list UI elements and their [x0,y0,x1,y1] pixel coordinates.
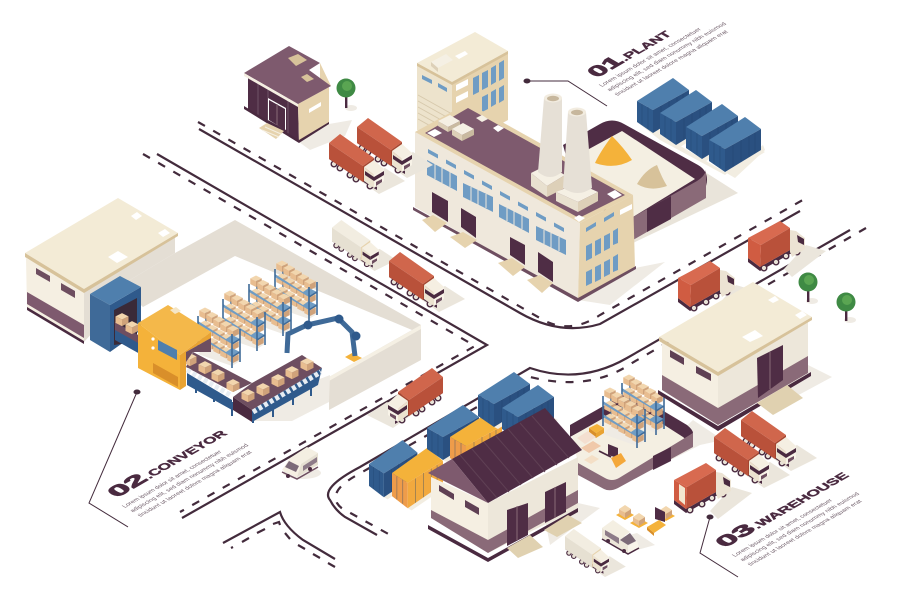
heading: 02.CONVEYOR [102,425,233,501]
icon: tree far right [836,292,856,323]
text block: plant: tincidunt ut laoreet dolore magna aliquam erat [613,29,730,97]
heading: 01.PLANT: .PLANT [616,29,676,63]
truck: red road [389,252,465,312]
truck: red north-east 2 [748,221,826,277]
heading: 01.PLANT: 01 [582,53,629,81]
icon: tree right [798,272,818,304]
text block: plant: Lorem ipsum dolor sit amet, consectetuer [598,27,703,88]
truck: red warehouse 2 [714,428,790,488]
truck: cream bottom [565,529,626,577]
heading: 03.WAREHOUSE [710,467,854,551]
yard goods [577,424,604,464]
left facade windows [427,149,566,255]
callout: 03 warehouse [700,467,870,577]
panel: conveyor belts [115,313,322,423]
truck: cream road [332,220,397,271]
heading: 02.CONVEYOR: .CONVEYOR [140,428,231,481]
panel: office building [244,46,352,150]
panel: factory tower [417,32,508,150]
panel: factory yard [563,120,738,243]
panel: right warehouse [658,282,832,431]
heading: 02.CONVEYOR: 02 [102,471,153,501]
factory doors [432,192,553,282]
truck: red warehouse 1 [741,411,817,471]
panel: forklift and pallets [616,505,675,536]
panel: yellow machine [138,305,211,390]
panel: blue containers plant [637,78,765,178]
forklift [599,444,626,468]
text block: warehouse: tincidunt ut laoreet dolore magna aliquam erat [746,499,864,567]
icon: tree near office [336,78,357,111]
text block: warehouse: Lorem ipsum dolor sit amet, consectetuer [731,498,835,558]
heading: 03.WAREHOUSE: .WAREHOUSE [748,470,852,531]
heading: 03.WAREHOUSE: 03 [710,521,761,551]
loading ramps [422,215,553,293]
panel: warehouse containers [369,372,558,510]
text block: plant: adipiscing elit, sed diam nonummy nibh euismod [605,21,729,93]
truck: red south-west [367,368,443,428]
text block: warehouse: adipiscing elit, sed diam nonummy nibh euismod [738,491,862,563]
panel: conveyor hall wall [120,220,421,421]
robot arm [287,314,362,362]
van: white road [282,447,321,479]
panel: warehouse yard [570,375,723,490]
text block: conveyor: adipiscing elit, sed diam nonummy nibh euismod [128,443,251,514]
van: white bottom [602,520,655,554]
heading: 01.PLANT [582,26,677,81]
truck: red warehouse open back [674,463,752,519]
panel: warehouse building [428,408,600,562]
truck: red top 1 [357,118,433,178]
panel: racks and robot arm [198,261,362,368]
text block: conveyor: Lorem ipsum dolor sit amet, consectetuer [121,449,224,509]
truck: red top 2 [329,134,405,194]
road network [143,122,866,567]
panel: conveyor building [25,198,178,344]
callout: 02 conveyor [89,390,259,527]
right facade windows [586,212,618,286]
panel: blue gate [90,276,141,352]
panel: chimneys [531,94,598,212]
panel: main factory building [413,103,665,305]
text block: conveyor: tincidunt ut laoreet dolore magna aliquam erat [136,450,254,518]
callout: 01 plant [524,17,737,106]
truck: red north-east 1 [678,261,756,317]
rooftop units [427,115,622,222]
